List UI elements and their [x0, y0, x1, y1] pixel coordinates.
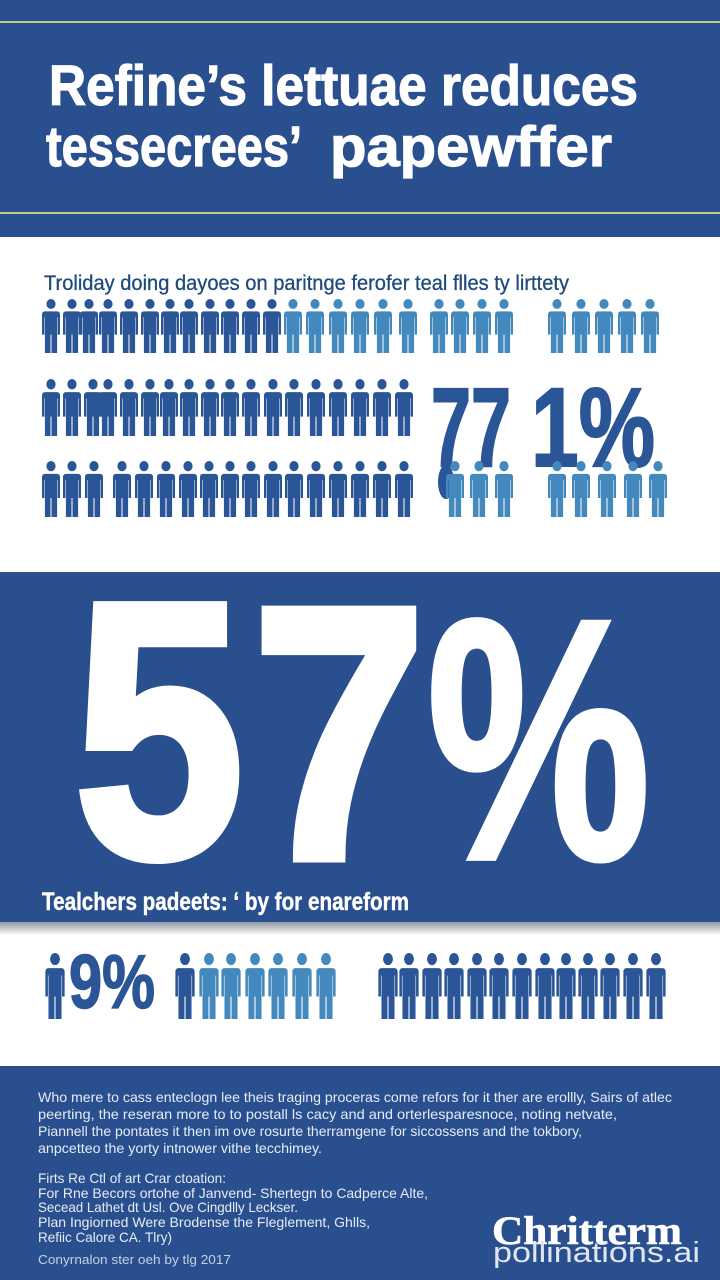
- big number 57%: [74, 528, 650, 935]
- copyright line: Conyrnalon ster oeh by tlg 2017: [38, 1252, 231, 1267]
- footer credits: Firts Re Ctl of art Crar ctoation:: [38, 1170, 226, 1186]
- title: papewffer: [330, 115, 612, 179]
- footer credits: Plan Ingiorned Were Brodense the Fleglement, Ghlls,: [38, 1214, 370, 1230]
- big number 57%: %: [427, 548, 650, 931]
- band shadow: [0, 922, 720, 935]
- pictogram row 1: [42, 299, 659, 353]
- footer paragraph: anpcetteo the yorty intnower vithe tecchimey.: [38, 1140, 322, 1156]
- lower pictogram: 9%: 9%: [69, 940, 155, 1025]
- footer paragraph: peerting, the reseran more to to postall ls cacy and and orterlesparesnoce, noting netvate,: [38, 1106, 617, 1122]
- header band: [0, 0, 720, 237]
- band caption: Tealchers padeets: ‘ by for enareform: [42, 888, 409, 916]
- big number 57%: 7: [252, 531, 426, 935]
- title: [46, 54, 638, 179]
- footer credits: For Rne Becors ortohe of Janvend- Shertegn to Cadperce Alte,: [38, 1185, 428, 1201]
- footer paragraph: Piannell the pontates it then im ove rosurte therramgene for siccossens and the tokbory,: [38, 1123, 582, 1139]
- pictogram row 2: [42, 379, 413, 436]
- footer paragraph: [38, 1089, 672, 1156]
- large statistic: 77 1%: [431, 365, 655, 498]
- footer paragraph: Who mere to cass enteclogn lee theis traging proceras come refors for it ther are erollly, Sairs of atlec: [38, 1089, 672, 1105]
- title: tessecrees’: [46, 115, 302, 179]
- logo wordmark: Chritterm: [492, 1208, 682, 1253]
- section heading: Troliday doing dayoes on paritnge ferofer teal flles ty lirttety: [44, 272, 569, 295]
- big number 57%: 5: [74, 528, 244, 934]
- large statistic: 77 1%: 1%: [531, 365, 655, 490]
- main statistic band: [0, 572, 720, 922]
- title: Refine’s lettuae reduces: [49, 54, 638, 118]
- large statistic: 77 1%: 77: [431, 365, 511, 490]
- footer credits: [38, 1170, 428, 1245]
- footer band: [0, 1066, 720, 1280]
- footer credits: Secead Lathet dt Usl. Ove Cingdlly Leckser.: [38, 1199, 298, 1215]
- lower pictogram: right group: [378, 953, 666, 1019]
- footer credits: Refiic Calore CA. Tlry): [38, 1229, 172, 1245]
- watermark: pollinations.ai: [493, 1237, 700, 1269]
- lower pictogram: left group: [175, 953, 336, 1019]
- lower pictogram: 9%: [45, 940, 155, 1025]
- pictogram row 3: [42, 461, 667, 517]
